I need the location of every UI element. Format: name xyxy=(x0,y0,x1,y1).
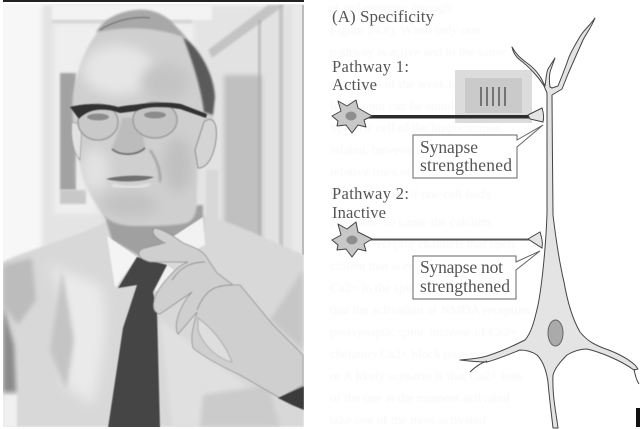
pathway 2 label: Inactive xyxy=(332,203,386,222)
photo background xyxy=(38,4,304,256)
hair xyxy=(183,37,215,115)
faint show-through body text xyxy=(328,0,530,427)
pathway 2 label xyxy=(332,184,409,222)
tie xyxy=(108,257,167,428)
faint show-through body text: relative lines of the LTP induced by xyxy=(330,164,516,179)
faint show-through body text: that the activation of NMDA receptors xyxy=(330,302,530,317)
pathway 1 label: Active xyxy=(332,75,377,94)
pathway 1 label xyxy=(332,57,409,94)
callout: synapse strengthened: Synapse xyxy=(420,137,478,157)
head xyxy=(70,10,216,226)
callout: synapse strengthened: strengthened xyxy=(420,155,512,175)
callout: synapse not strengthened xyxy=(413,251,540,299)
callout: synapse not strengthened: strengthened xyxy=(420,276,510,296)
panel title: (A) Specificity xyxy=(332,7,434,26)
faint show-through body text: postsynaptic spine increase of Ca2+ xyxy=(330,324,517,339)
pathway 1 neuron and axon xyxy=(332,100,544,133)
faint show-through body text: Specific cell of the hippocampus xyxy=(330,120,500,135)
faint show-through body text: NMDA receptor channels that open xyxy=(330,236,515,251)
faint show-through body text: of and memory through xyxy=(328,0,452,15)
faint show-through body text: lated input can be simultaneous xyxy=(330,98,494,113)
faint show-through body text: take one of the most activated xyxy=(330,412,486,427)
pathway 1 label: Pathway 1: xyxy=(332,57,409,76)
faint show-through body text: important role of one cell body xyxy=(330,186,492,201)
faint show-through body text: related, however, is possible. The xyxy=(330,142,504,157)
corner black mark xyxy=(636,408,640,427)
photo: portrait of a man in shirt and tie xyxy=(3,4,304,428)
stimulation box with tick marks xyxy=(455,70,532,123)
faint show-through body text: ciment that is essential for LTP xyxy=(330,258,492,273)
mouth xyxy=(106,176,154,181)
faint show-through body text: chelators Ca2+ block post-synaptic xyxy=(330,346,513,361)
pathway 2 label: Pathway 2: xyxy=(332,184,409,203)
shirt xyxy=(3,215,304,427)
callout: synapse not strengthened: Synapse not xyxy=(420,257,503,277)
callout: synapse strengthened xyxy=(413,125,543,178)
target neuron nucleus xyxy=(548,320,563,346)
faint show-through body text: excitation of the weak input xyxy=(330,76,476,91)
pathway 2 neuron and axon xyxy=(332,222,542,257)
glasses xyxy=(70,102,207,140)
left ear edge xyxy=(72,122,82,160)
faint show-through body text: of the one at the moment activated xyxy=(330,390,510,405)
faint show-through body text: pathway is active and to the same xyxy=(330,44,505,59)
target neuron with dendrites xyxy=(460,18,639,428)
ear xyxy=(195,119,216,168)
faint show-through body text: channels. To cause the calcium xyxy=(330,214,491,229)
top black bar xyxy=(3,0,304,2)
neck xyxy=(103,205,203,262)
faint show-through body text: or A likely scenario is that Ca2+ ions xyxy=(330,368,523,383)
hand xyxy=(139,228,303,398)
collar xyxy=(107,217,205,293)
faint show-through body text: Figure 24.8). When only one xyxy=(330,22,480,37)
dark cuff xyxy=(278,386,304,410)
nose xyxy=(112,118,145,154)
faint show-through body text: Ca2+ in the spines of CA1 neurons xyxy=(330,280,513,295)
